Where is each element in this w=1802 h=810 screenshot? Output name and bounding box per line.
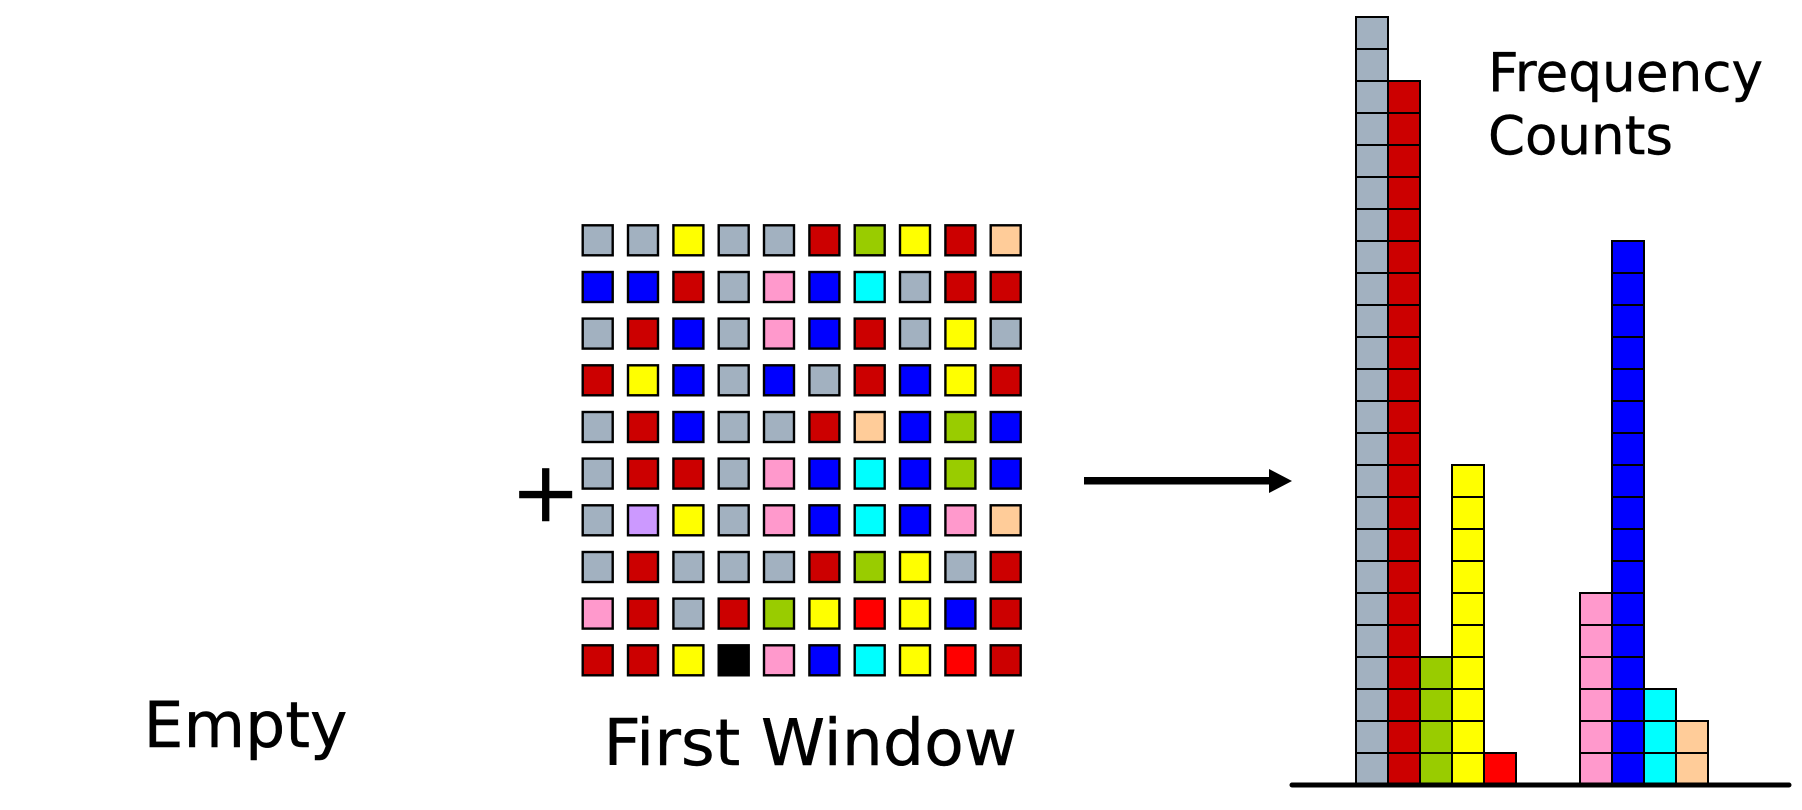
plus sign: + bbox=[510, 443, 581, 541]
grid row 9 bbox=[583, 599, 1021, 629]
label: Empty: Empty bbox=[144, 689, 348, 762]
bar: red, 1 count bbox=[1484, 753, 1516, 785]
arrow bbox=[1084, 469, 1292, 493]
bar: cyan, 3 counts bbox=[1644, 689, 1676, 785]
grid row 10 bbox=[583, 645, 1021, 675]
label: Frequency Counts: Counts bbox=[1488, 104, 1673, 167]
bar: grey, 24 counts bbox=[1356, 17, 1388, 785]
bar: blue, 17 counts bbox=[1612, 241, 1644, 785]
label: First Window: First Window bbox=[604, 707, 1017, 781]
bar: green, 4 counts bbox=[1420, 657, 1452, 785]
label: Frequency Counts: Frequency bbox=[1488, 41, 1763, 104]
grid row 5 bbox=[583, 412, 1021, 442]
grid row 7 bbox=[583, 505, 1021, 535]
grid row 4 bbox=[583, 365, 1021, 395]
histogram baseline bbox=[1292, 782, 1789, 788]
bar: peach, 2 counts bbox=[1676, 721, 1708, 785]
grid row 1 bbox=[583, 225, 1021, 255]
grid row 3 bbox=[583, 319, 1021, 349]
bar: dark red, 22 counts bbox=[1388, 81, 1420, 785]
grid row 8 bbox=[583, 552, 1021, 582]
panel: first window colour grid bbox=[583, 225, 1021, 675]
bar: pink, 6 counts bbox=[1580, 593, 1612, 785]
panel: frequency histogram bbox=[1292, 17, 1789, 785]
bar: yellow, 10 counts bbox=[1452, 465, 1484, 785]
label: Frequency Counts bbox=[1488, 41, 1763, 167]
grid row 6 bbox=[583, 459, 1021, 489]
grid row 2 bbox=[583, 272, 1021, 302]
